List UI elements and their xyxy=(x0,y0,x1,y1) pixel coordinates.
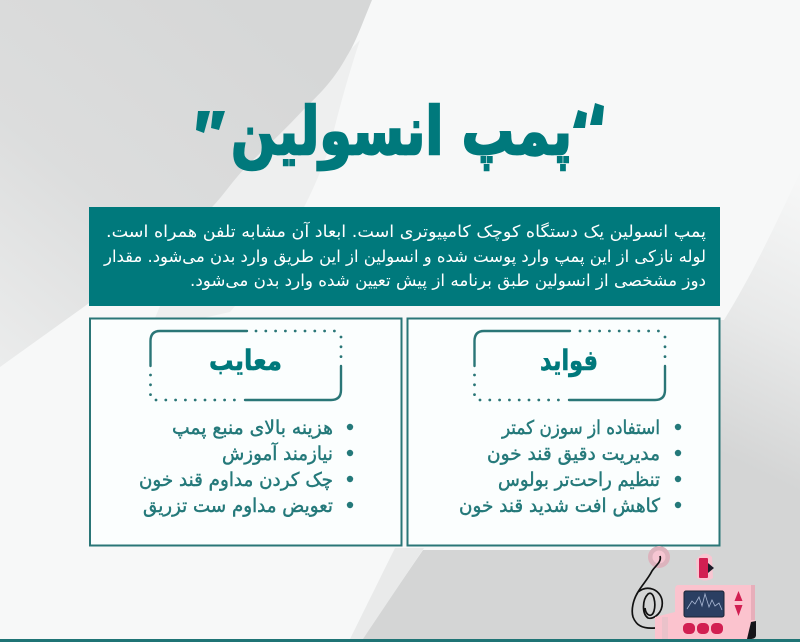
title text: پمپ انسولین xyxy=(231,93,572,171)
intro text: لوله نازکی از این پمپ وارد پوست شده و انسولین از این طریق وارد بدن می‌شود. مقدار xyxy=(103,247,706,267)
screen xyxy=(684,591,724,617)
list xyxy=(459,417,661,517)
opening quote mark xyxy=(573,103,604,128)
icon: insulin pump xyxy=(632,546,756,639)
list: کاهش افت شدید قند خون xyxy=(459,495,661,517)
panel: disadvantages xyxy=(90,318,402,546)
panel: advantages xyxy=(408,318,720,546)
heading frame xyxy=(150,331,341,400)
list xyxy=(139,417,333,517)
intro text: پمپ انسولین یک دستگاه کوچک کامپیوتری است. ابعاد آن مشابه تلفن همراه است. xyxy=(106,222,706,242)
intro text xyxy=(103,222,706,291)
intro text: دوز مشخصی از انسولین طبق برنامه از پیش تعیین شده وارد بدن می‌شود. xyxy=(190,271,706,291)
list: نیازمند آموزش xyxy=(222,441,333,465)
bullets xyxy=(347,424,353,508)
list: مدیریت دقیق قند خون xyxy=(487,443,660,465)
intro panel xyxy=(89,207,720,306)
list: تعویض مداوم ست تزریق xyxy=(143,495,333,517)
bullets xyxy=(675,424,681,508)
list: چک کردن مداوم قند خون xyxy=(139,469,333,491)
pump body xyxy=(655,585,755,639)
bottom rule xyxy=(0,639,800,642)
arrow buttons xyxy=(734,591,742,616)
round buttons xyxy=(683,623,723,634)
infusion site xyxy=(648,546,670,568)
heading: معایب xyxy=(209,344,282,377)
pump clip xyxy=(696,554,714,580)
heading frame xyxy=(474,331,665,400)
tubing xyxy=(632,556,662,628)
heading: فواید xyxy=(540,344,598,377)
list: تنظیم راحت‌تر بولوس xyxy=(498,469,660,491)
list: هزینه بالای منبع پمپ xyxy=(172,417,333,439)
title xyxy=(196,93,604,171)
closing quote mark xyxy=(196,111,225,133)
list: استفاده از سوزن کمتر xyxy=(501,417,660,439)
